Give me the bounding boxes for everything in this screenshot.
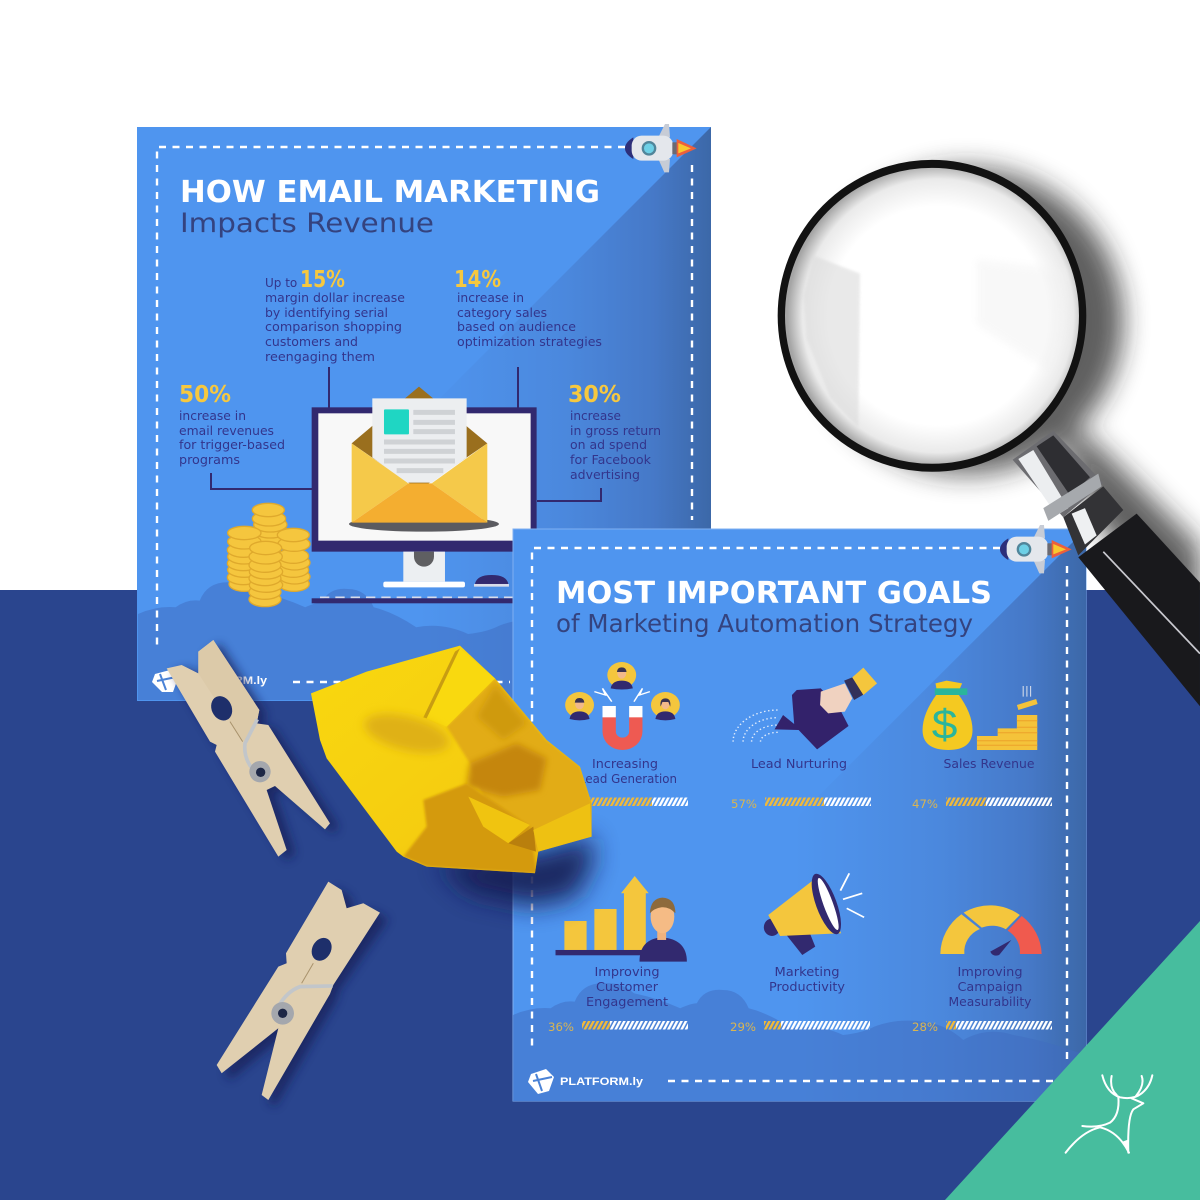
- rocket: [1000, 525, 1072, 573]
- rocket: [625, 124, 697, 172]
- clothespin: top: [167, 640, 338, 861]
- goal: increasing lead generation: Lead Generation: [579, 772, 677, 786]
- goal: lead nurturing: 57%: [731, 797, 757, 811]
- stat: 30 percent: in gross return: [570, 424, 661, 438]
- title: [556, 576, 992, 638]
- goal: improving customer engagement: Improving: [594, 965, 660, 979]
- goal: improving campaign measurability: 28%: [912, 1020, 938, 1034]
- stat: up to 15 percent: by identifying serial: [265, 306, 388, 320]
- crumpled yellow paper: [311, 646, 593, 907]
- magnifier shadow: [810, 168, 1200, 623]
- stat: 50 percent: email revenues: [179, 424, 274, 438]
- icon: money bag and coin stacks: [923, 681, 1038, 750]
- lens rim: [781, 164, 1083, 468]
- icon: watering can held by hand: [733, 668, 877, 749]
- goal: improving campaign measurability: Measurability: [948, 995, 1032, 1009]
- goal: increasing lead generation: Increasing: [592, 757, 658, 771]
- stat: 30 percent: on ad spend: [570, 438, 647, 452]
- goal: marketing productivity: Marketing: [774, 965, 840, 979]
- handle ferrule: [1013, 431, 1123, 555]
- stat: 50 percent: 50%: [179, 382, 231, 408]
- stat: 14 percent: [454, 267, 602, 349]
- stat: up to 15 percent: comparison shopping: [265, 320, 402, 334]
- icon: deer logo: [1066, 1075, 1152, 1153]
- goal: lead nurturing: Lead Nurturing: [751, 757, 847, 771]
- title: Impacts Revenue: [180, 208, 434, 239]
- platform logo: PLATFORM.ly: [185, 675, 268, 687]
- magnifying glass: [781, 164, 1200, 706]
- stat: 30 percent: advertising: [570, 468, 640, 482]
- clothespin: bottom: [217, 882, 388, 1107]
- stat: up to 15 percent: reengaging them: [265, 350, 375, 364]
- icon: magnet attracting people: [565, 662, 680, 750]
- goal: improving campaign measurability: Improving: [958, 965, 1022, 979]
- green corner triangle: [945, 921, 1200, 1200]
- stat: 14 percent: 14%: [454, 267, 501, 293]
- goal: improving customer engagement: Customer: [596, 980, 658, 994]
- navy desk background: [0, 590, 1200, 1200]
- goal: improving customer engagement: Engagement: [586, 995, 668, 1009]
- stat: 30 percent: for Facebook: [570, 453, 651, 467]
- platform logo: PLATFORM.ly: [560, 1076, 644, 1088]
- stat: 50 percent: for trigger-based: [179, 438, 285, 452]
- goal: lead nurturing: [731, 757, 871, 811]
- stat: up to 15 percent: margin dollar increase: [265, 291, 405, 305]
- clouds: [513, 983, 1086, 1101]
- stat: 14 percent: optimization strategies: [457, 335, 602, 349]
- stat: 50 percent: [179, 382, 285, 467]
- stat: up to 15 percent: Up to: [265, 276, 297, 290]
- stat: 14 percent: based on audience: [457, 320, 576, 334]
- goal: improving campaign measurability: Campaign: [958, 980, 1022, 994]
- goal: marketing productivity: Productivity: [769, 980, 845, 994]
- stat: 30 percent: [568, 382, 661, 482]
- monitor with envelope: [312, 387, 537, 603]
- stat: up to 15 percent: customers and: [265, 335, 358, 349]
- handle grip: [1078, 514, 1200, 706]
- goal: improving customer engagement: [548, 965, 688, 1034]
- stat: 50 percent: increase in: [179, 409, 246, 423]
- stat: 50 percent: programs: [179, 453, 240, 467]
- goal: marketing productivity: [730, 965, 870, 1034]
- goal: sales revenue: 47%: [912, 797, 938, 811]
- goal: increasing lead generation: [579, 757, 688, 806]
- icon: bar chart and person: [556, 876, 687, 962]
- coin stacks: [227, 503, 310, 607]
- stat: 14 percent: increase in: [457, 291, 524, 305]
- goal: sales revenue: Sales Revenue: [944, 757, 1034, 771]
- stat: up to 15 percent: [265, 267, 405, 364]
- title: HOW EMAIL MARKETING: [180, 175, 600, 210]
- icon: megaphone: [764, 871, 864, 955]
- platform logo: [152, 670, 268, 692]
- stat: 30 percent: 30%: [568, 382, 621, 408]
- icon: speed gauge: [940, 905, 1042, 956]
- title: [180, 175, 600, 239]
- stat: 14 percent: category sales: [457, 306, 547, 320]
- clouds: [138, 582, 711, 700]
- stat: up to 15 percent: 15%: [300, 267, 345, 293]
- panel: how email marketing impacts revenue: [137, 124, 711, 701]
- title: of Marketing Automation Strategy: [556, 609, 973, 638]
- goal: improving campaign measurability: [912, 965, 1052, 1034]
- connector lines: [211, 367, 601, 501]
- icon: money bag and coin stacks: $: [932, 701, 958, 748]
- stat: 30 percent: increase: [570, 409, 621, 423]
- goal: marketing productivity: 29%: [730, 1020, 756, 1034]
- title: MOST IMPORTANT GOALS: [556, 576, 992, 611]
- goal: improving customer engagement: 36%: [548, 1020, 574, 1034]
- goal: sales revenue: [912, 757, 1052, 811]
- panel: most important goals: [513, 525, 1086, 1101]
- platform logo: [528, 1069, 644, 1094]
